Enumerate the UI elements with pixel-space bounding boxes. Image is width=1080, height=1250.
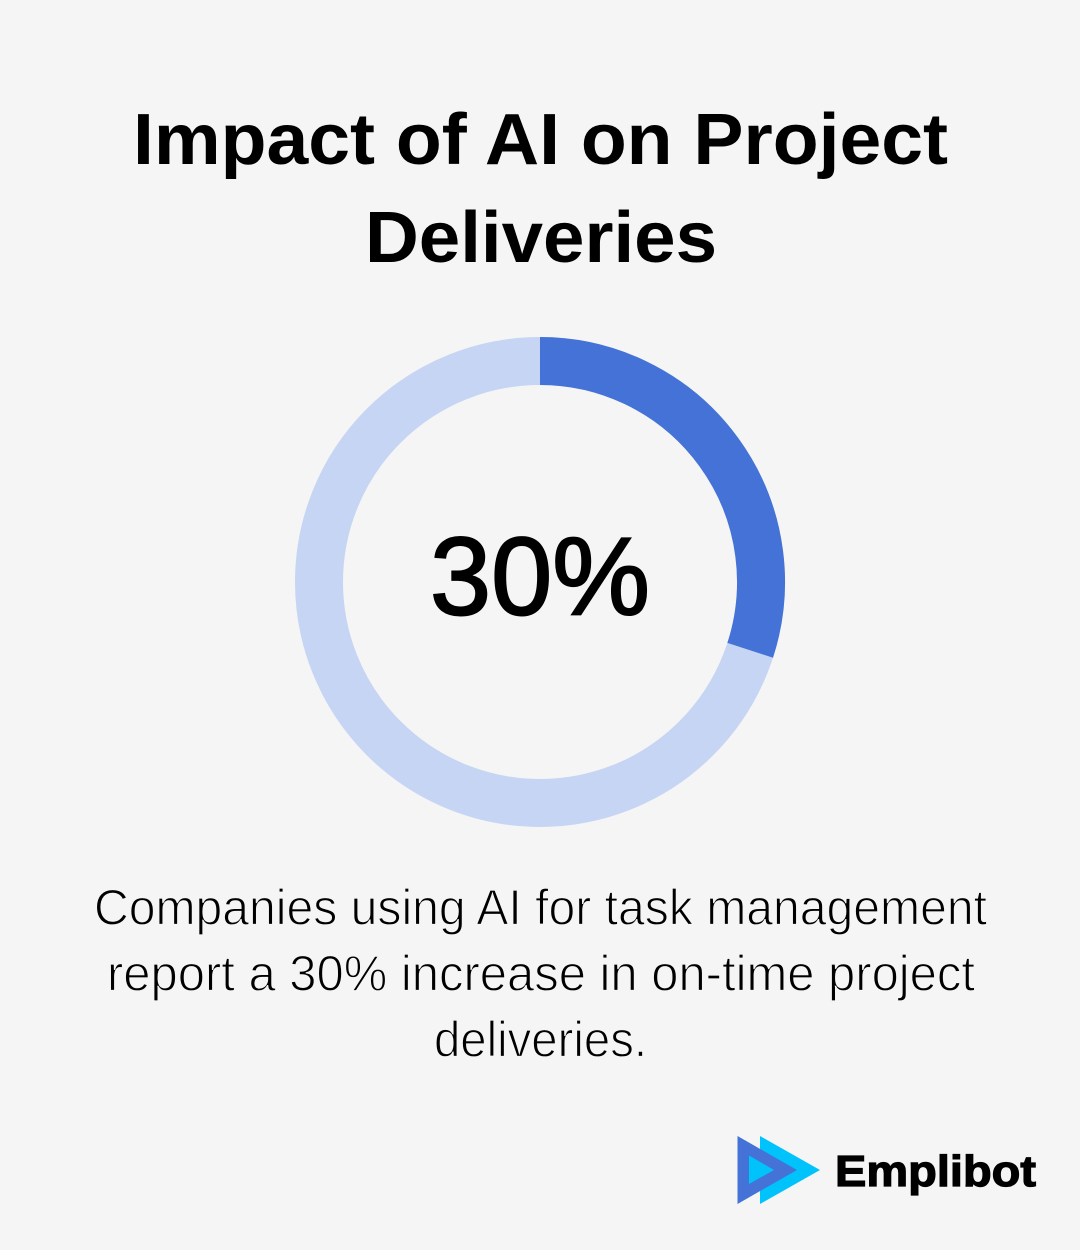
- title: Deliveries: [365, 198, 717, 278]
- donut chart: 30%: [319, 361, 761, 803]
- description text: Companies using AI for task management: [94, 880, 987, 936]
- description text: report a 30% increase in on-time project: [107, 946, 975, 1002]
- title: Impact of AI on Project: [133, 100, 948, 180]
- description text: [94, 880, 987, 1068]
- logo wordmark: Emplibot: [835, 1147, 1036, 1196]
- description text: deliveries.: [434, 1012, 647, 1068]
- donut value: 30%: [430, 516, 650, 638]
- title: [133, 100, 948, 278]
- logo: Emplibot: [738, 1136, 1036, 1204]
- icon: play triangles: [738, 1136, 820, 1204]
